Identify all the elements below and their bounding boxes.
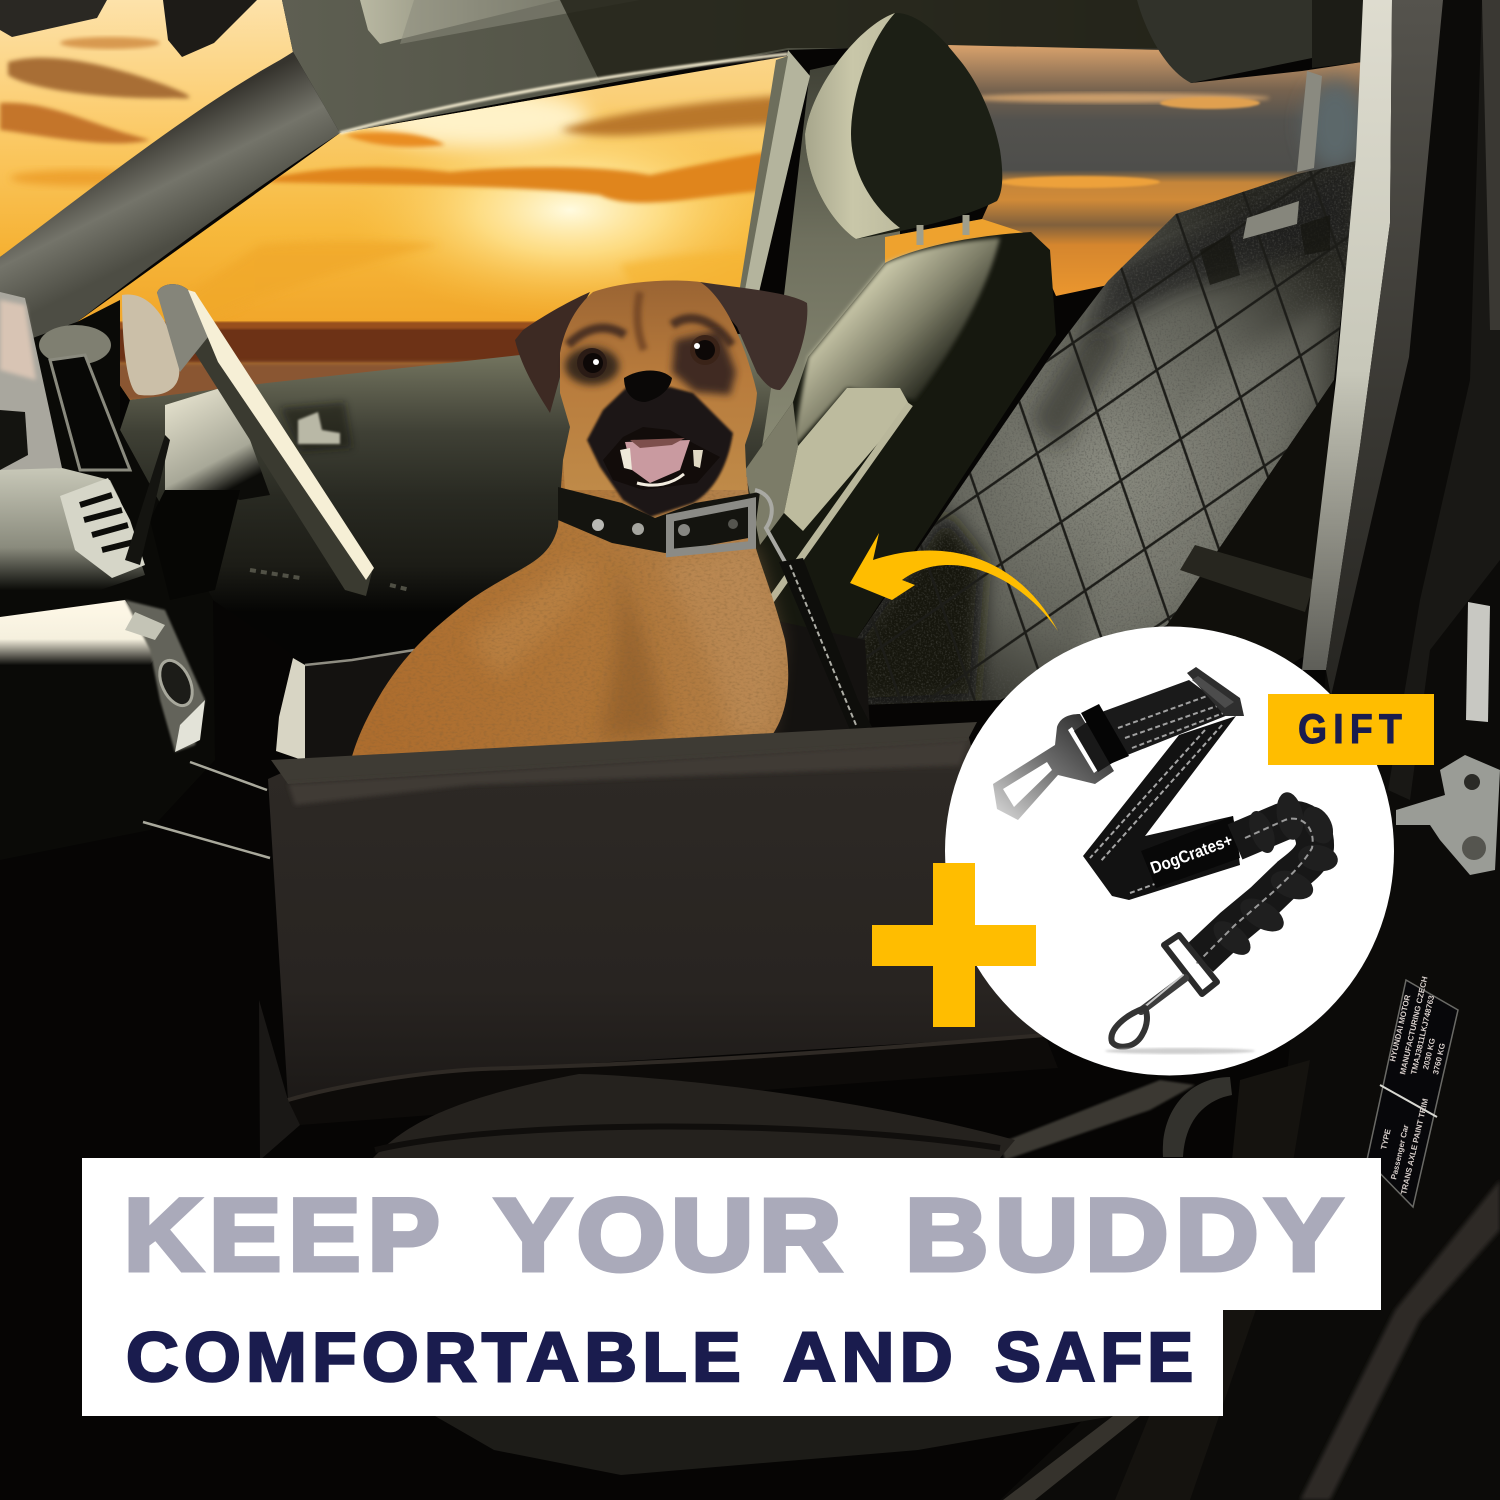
sunset through side window [70,50,800,410]
gift badge: GIFT [1298,705,1408,752]
seat lit shoulder [793,238,1000,446]
strap through buckle [1074,713,1125,772]
dog brow wrinkles [568,292,732,350]
door sticker [1466,602,1490,722]
gift badge [1268,694,1434,765]
seat cover brand tag [1243,201,1299,239]
dog left ear [515,292,590,413]
roof header and sun visor [282,0,1160,133]
dog collar [558,487,760,553]
lower door sill and seat base [435,1060,1500,1500]
top strap [1099,680,1233,756]
interior mirror shapes at top of windshield [0,0,257,57]
bungee section [1195,790,1340,965]
yellow plus sign [872,863,1036,1027]
box lower seam band [288,1035,1058,1125]
door pillar and door [1000,0,1500,1500]
box top rim [271,722,977,784]
seat side below the cover [1167,380,1334,690]
dashboard [0,292,270,860]
white headline banner [82,1158,1381,1416]
rear headrest and post [1137,0,1364,172]
branded label: DogCrates+ [1148,830,1235,878]
dog left eye [577,348,607,378]
A-pillar [0,52,340,350]
yellow arrow [850,533,1058,631]
indicator stalk [125,435,170,565]
lit dash fascia [0,600,160,665]
centre controls [125,600,205,752]
branded label [1141,816,1240,888]
dog fur texture [354,468,788,755]
door panel [120,330,810,660]
gift safety belt leash [993,667,1340,1054]
headline line two: COMFORTABLE [126,1318,746,1396]
dog body [351,460,788,760]
door information label [1367,975,1458,1207]
buckle cut-outs [1003,727,1098,807]
headline line two [126,1318,1198,1396]
dash thin trim lines [143,762,270,858]
door information label: MANUFACTURING CZECH [1398,975,1430,1075]
door information label: TMAJ3811LKJ748763 [1409,994,1436,1075]
booster box inner and fleece lining [276,620,870,770]
sunset through rear window [880,40,1370,300]
door pocket details [250,570,410,590]
dog eye patches [565,330,736,395]
white gift circle [945,626,1394,1076]
dog head [560,280,757,490]
window seal highlight [340,54,788,133]
door information label: TRANS AXLE PAINT TRIM [1399,1097,1430,1195]
door handle [280,402,352,452]
seat cushion [259,1000,1015,1160]
dog nose [624,370,672,402]
door information label: Passenger Car [1389,1124,1411,1180]
hook shadow [1105,1048,1255,1054]
headline line one [124,1178,1349,1292]
box highlight strip [288,741,967,805]
steering wheel [125,284,374,600]
dog mouth [603,427,720,490]
door information label: 3760 KG [1431,1042,1447,1075]
long diagonal strap [1083,716,1240,900]
seat side bolster [745,402,798,545]
headline line one: KEEP [124,1178,447,1292]
dog muzzle mask [587,387,733,517]
dog chest shading [470,545,780,740]
wheel rim lit edge [188,290,374,580]
B-pillar wall behind seat [760,50,900,640]
quilted seat cover [857,161,1356,705]
headline line two: AND [783,1318,958,1396]
dog right ear [700,282,807,390]
front seat headrest [805,13,1002,245]
seat piping line [769,404,910,603]
dash top carbon panel [0,468,145,590]
front seat back [745,232,1056,650]
wheel hub hood [165,385,270,500]
headline line two: SAFE [995,1318,1198,1396]
dog [350,280,807,760]
door information label: 2030 KG [1421,1037,1437,1070]
round mirror [122,294,179,395]
door latch [1396,755,1500,875]
dog right eye [690,335,720,365]
seat inner cushion [784,388,910,531]
wheel rim dark [157,284,372,596]
air vent [60,478,145,578]
leash clipped to collar [755,490,872,730]
sunset through windshield [0,0,300,260]
headline line one: YOUR [495,1178,847,1292]
metal snap hook [1111,935,1217,1047]
door information label: HYUNDAI MOTOR [1388,994,1412,1062]
phone holder [0,292,130,472]
box face [268,730,1045,1100]
strap loop keeper [1081,704,1129,764]
window frame trim [738,50,810,322]
booster box [268,722,1058,1125]
metal buckle tongue [993,714,1114,820]
door information label: TYPE [1379,1127,1393,1150]
adjuster slide [1187,667,1244,716]
headline line one: BUDDY [905,1178,1349,1292]
